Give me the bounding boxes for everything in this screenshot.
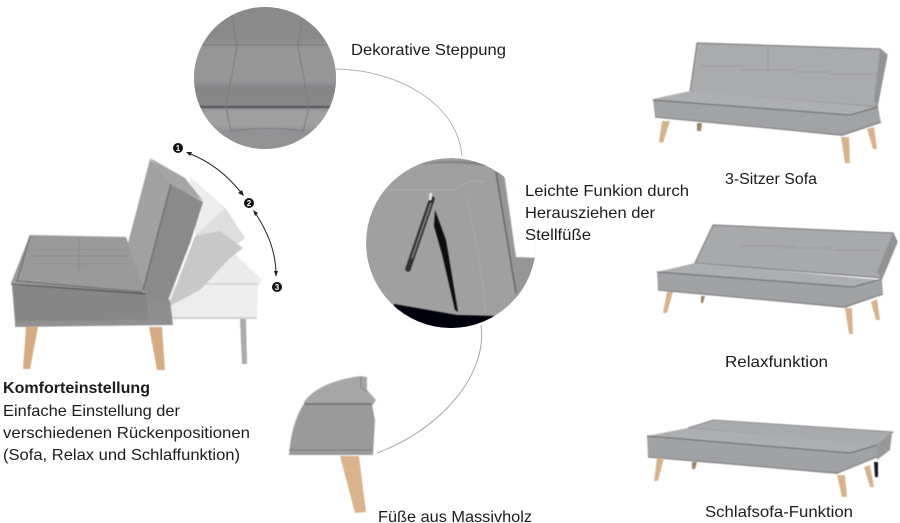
seat top [647,428,877,453]
text block: comfort adjustment: verschiedenen Rückenpositionen [3,425,250,442]
metal support [874,462,878,477]
seat top [657,263,882,287]
tufting [700,46,880,74]
label: decorative stitching: Dekorative Steppung [351,42,506,59]
marker 3: 3 [275,283,280,292]
seat base strip [15,320,173,327]
seat top [11,235,146,294]
floor shadow [393,303,495,328]
sofa: three-seater position [653,43,887,163]
label: pull-out function: Leichte Funkion durch [525,183,689,200]
seat front [12,285,148,322]
side flap [877,433,892,460]
outer white area [504,177,536,258]
text block: comfort adjustment: (Sofa, Relax und Schlaffunktion) [3,447,240,464]
marker 2: 2 [247,199,252,208]
seat front [647,436,877,474]
left wooden leg [23,327,38,369]
side strip [496,171,535,298]
sofa: sleeping position [647,420,893,497]
right wooden leg [149,327,165,370]
detail: solid wood foot [289,376,376,513]
legs [654,458,874,497]
detail circle: pull-out function [366,158,536,328]
wooden leg [340,456,366,513]
legs [659,121,877,163]
back top [150,158,203,201]
connector line: stitching to function detail [336,69,462,156]
metal bar [408,199,432,269]
marker 1 [173,143,183,153]
marker 3 [272,282,282,292]
back part flat [688,420,893,446]
seat front [653,99,881,136]
seat top [653,91,878,115]
sofa side view with reclining positions [11,143,282,370]
slit [434,210,458,312]
back [690,43,887,107]
upper edge [416,160,488,167]
connector line: function detail to wooden feet [377,325,482,453]
detail circle: decorative stitching [194,7,336,149]
tufting [740,246,880,250]
label: relax function: Relaxfunktion [725,354,828,371]
sofa: relax position [657,225,897,334]
marker 2 [244,198,254,208]
reclining ghost positions [168,177,262,364]
label: sofa bed function: Schlafsofa-Funktion [705,504,853,521]
text block: comfort adjustment: Einfache Einstellung der [3,403,181,420]
label: pull-out function: Stellfüße [525,227,591,244]
text block: comfort adjustment: Komforteinstellung [3,380,150,397]
back side [143,184,203,303]
seat side [289,405,375,455]
base bridge [140,286,173,325]
seat front [657,272,883,308]
back front face [128,159,171,287]
cushion top [304,376,376,406]
label: three-seater sofa: 3-Sitzer Sofa [725,171,817,188]
legs [663,292,880,334]
label: pull-out function: Herausziehen der [525,205,656,222]
marker 1: 1 [176,144,181,153]
position arrows [188,153,276,275]
back [695,225,897,278]
fabric seam [455,181,483,190]
